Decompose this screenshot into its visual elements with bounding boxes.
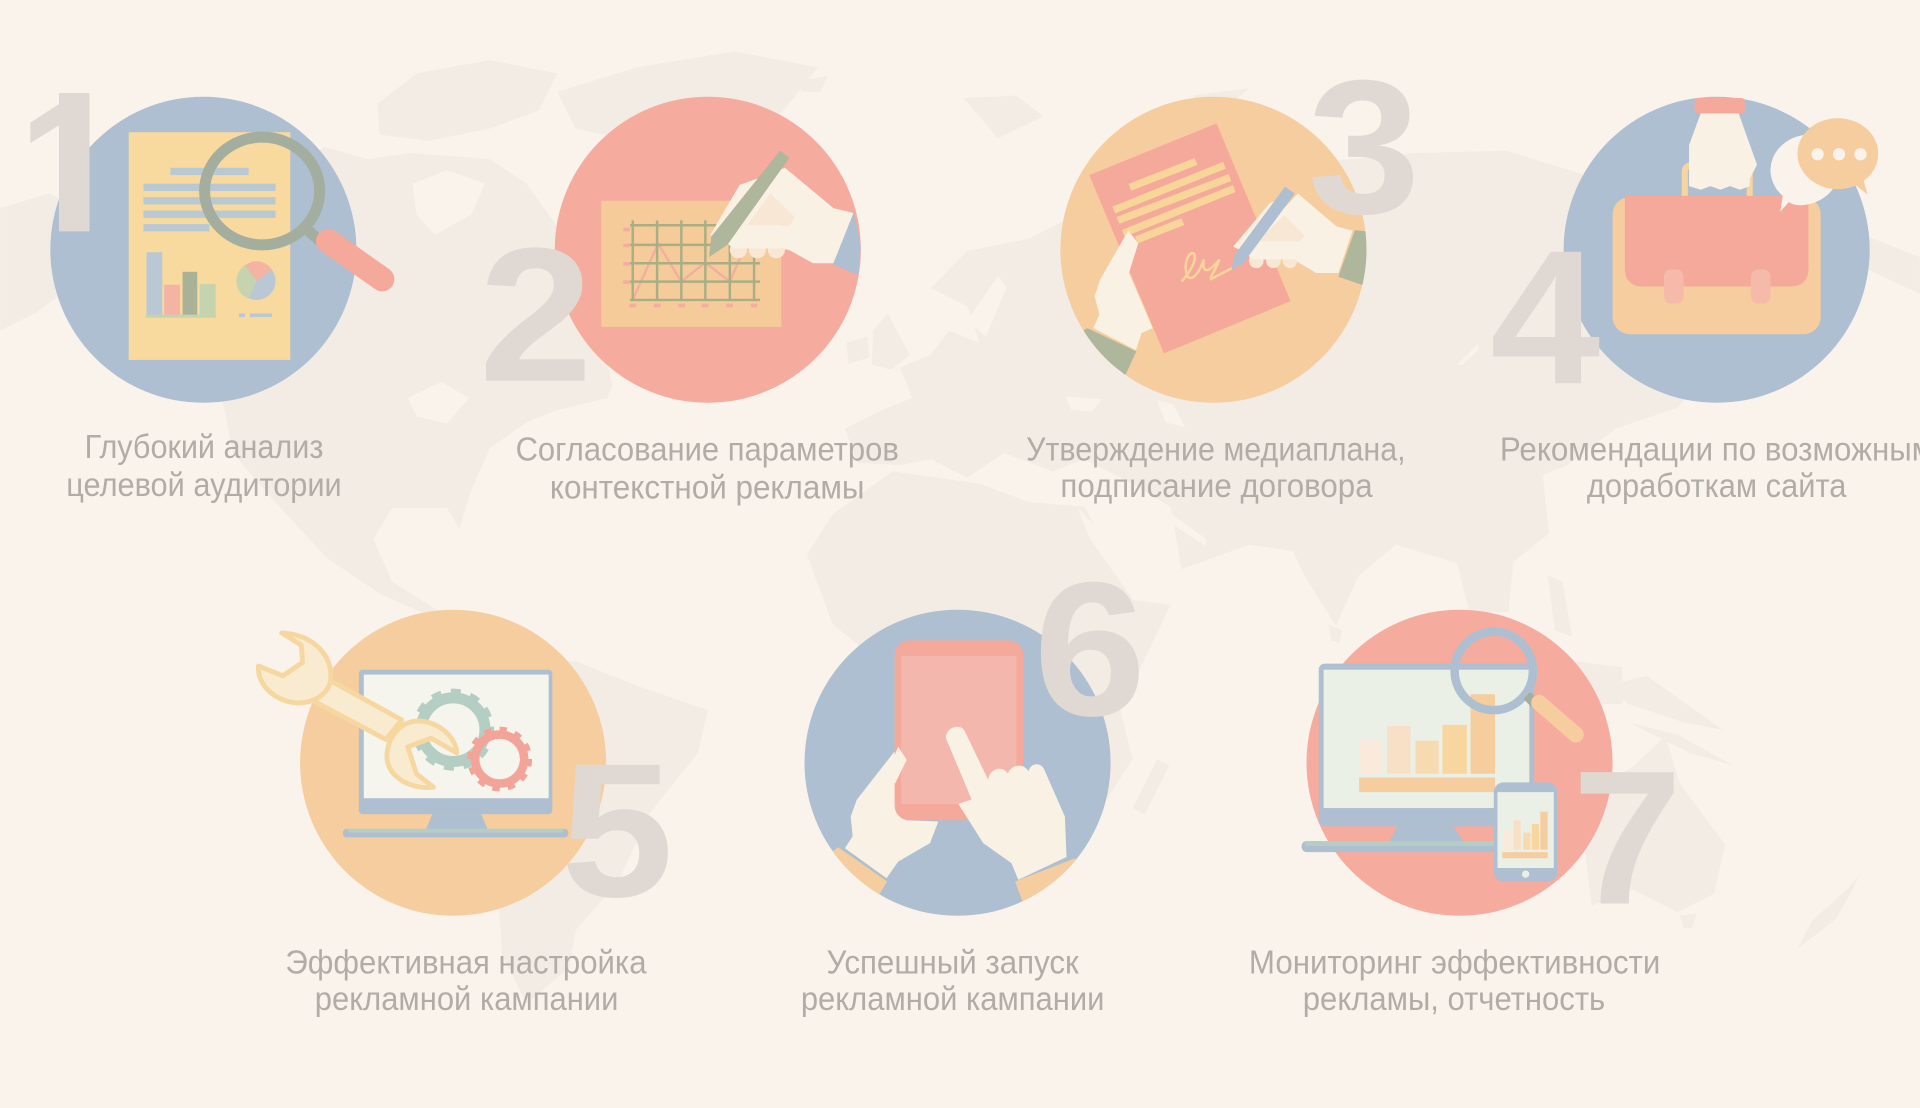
document	[129, 132, 290, 360]
number 6: 6	[1033, 543, 1146, 756]
circle 6	[805, 610, 1111, 916]
caption 3	[1026, 431, 1406, 505]
panel: step 6	[802, 582, 1139, 1017]
panel: step 1	[17, 61, 382, 504]
number 3: 3	[1308, 41, 1420, 254]
caption 3: подписание договора	[1060, 468, 1373, 505]
caption 3: Утверждение медиаплана,	[1026, 431, 1406, 468]
number 7: 7	[1572, 732, 1682, 945]
panel: step 5	[258, 610, 674, 1018]
panel: step 7	[1249, 610, 1682, 1018]
panel: step 3	[1027, 80, 1413, 504]
caption 4	[1500, 431, 1920, 505]
caption 6	[801, 944, 1104, 1018]
circle 1	[50, 97, 356, 403]
monitor with chart	[1302, 664, 1534, 852]
caption 1: Глубокий анализ	[85, 429, 323, 466]
contract sheet	[1089, 123, 1291, 353]
caption 1: целевой аудитории	[66, 467, 342, 504]
magnifier	[205, 137, 382, 279]
monitor	[343, 670, 568, 837]
circle 7	[1306, 610, 1613, 916]
caption 7	[1249, 944, 1660, 1018]
number 4: 4	[1490, 211, 1600, 424]
hand on handle	[1689, 98, 1757, 190]
circle 3	[1060, 97, 1366, 403]
caption 1	[66, 429, 342, 504]
gears	[415, 692, 530, 789]
circle 2	[555, 97, 861, 403]
caption 5: рекламной кампании	[315, 981, 618, 1018]
wrench	[258, 633, 457, 788]
hands with pen	[1084, 186, 1366, 375]
panel: step 4	[1490, 97, 1920, 505]
smartphone	[1494, 782, 1557, 882]
caption 6: рекламной кампании	[801, 981, 1104, 1018]
number 2: 2	[479, 209, 593, 422]
chart sheet	[601, 201, 781, 327]
caption 4: доработкам сайта	[1587, 468, 1847, 505]
circle 5	[300, 610, 606, 916]
circle 4	[1564, 97, 1870, 403]
caption 2: контекстной рекламы	[550, 469, 865, 506]
number 5: 5	[561, 724, 674, 937]
hand with pencil	[709, 151, 861, 275]
caption 6: Успешный запуск	[827, 944, 1079, 981]
map water bodies	[408, 170, 1479, 594]
hand holding phone	[832, 751, 938, 894]
number 1: 1	[17, 61, 124, 274]
pointing hand	[946, 726, 1076, 902]
caption 7: рекламы, отчетность	[1303, 981, 1605, 1018]
caption 2: Согласование параметров	[516, 431, 899, 468]
phone	[888, 640, 1023, 820]
briefcase	[1613, 165, 1821, 334]
speech bubbles	[1770, 118, 1878, 212]
caption 7: Мониторинг эффективности	[1249, 944, 1660, 981]
caption 2	[516, 431, 899, 506]
panel: step 2	[479, 97, 899, 506]
caption 5	[285, 944, 647, 1018]
caption 5: Эффективная настройка	[285, 944, 647, 981]
number 1	[30, 93, 90, 232]
magnifier	[1455, 632, 1576, 735]
